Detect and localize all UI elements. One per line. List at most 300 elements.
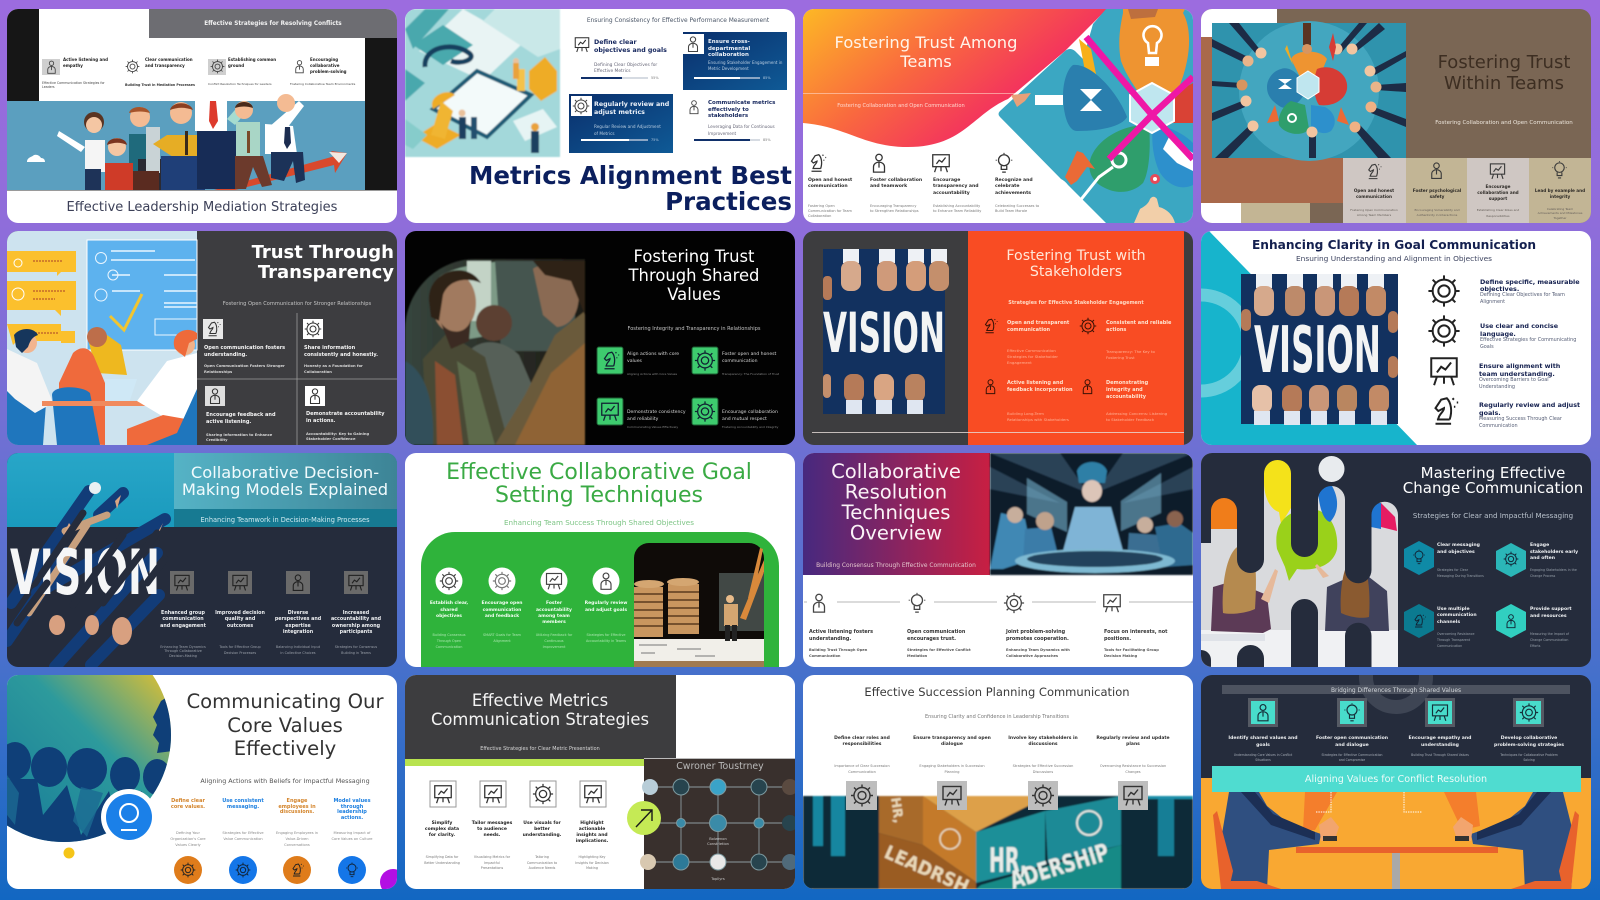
panel: enhancing clarity in goal communication	[1153, 231, 1591, 445]
action items: Communication for Team	[808, 209, 852, 213]
dark capsule overlay	[1201, 453, 1398, 667]
benefit text: ownership among	[332, 623, 381, 629]
subtitle: Aligning Actions with Beliefs for Impactful Messaging	[200, 777, 370, 785]
title: Stakeholders	[1030, 264, 1122, 280]
list text: objectives.	[1480, 285, 1519, 293]
value items	[597, 347, 780, 429]
tile: communicate metrics: effectively to	[708, 107, 749, 113]
benefit text: Decision-Making	[169, 654, 197, 658]
tile: cross-departmental collaboration: 85%	[763, 76, 771, 80]
title: Setting Techniques	[495, 483, 703, 508]
panel: trust through transparency	[7, 231, 397, 445]
strategy items: and transparency	[145, 63, 185, 68]
tile: cross-departmental collaboration: collaboration	[708, 52, 749, 58]
value text: and Compromise	[1339, 758, 1365, 762]
value icons	[174, 856, 366, 884]
title: Within Teams	[1444, 73, 1564, 94]
value text	[1228, 735, 1564, 762]
strategy text: understanding.	[523, 832, 562, 838]
plan text: Strategies for Effective Succession	[1013, 764, 1073, 768]
subtitle: Building Consensus Through Effective Communication	[816, 563, 976, 569]
list text: Alignment	[1480, 299, 1505, 305]
technique text: Encourage open	[482, 600, 522, 606]
plan text: Importance of Clear Succession	[834, 764, 890, 768]
illustration: hands around hub	[1212, 21, 1406, 161]
benefit icons	[170, 571, 368, 594]
hexagon icons	[1404, 541, 1526, 638]
value items: and mutual respect	[722, 416, 767, 422]
values text: leadership	[337, 809, 367, 815]
value text: Foster open communication	[1316, 735, 1388, 741]
value items: communication	[722, 358, 758, 364]
values text: discussions.	[280, 809, 314, 815]
value items: Demonstrate consistency	[627, 409, 686, 415]
technique text: shared	[440, 607, 458, 613]
action items: Fostering Open	[808, 204, 835, 208]
tiles: Authenticity in Interactions	[1417, 213, 1458, 217]
panel: collaborative decision-making models	[7, 453, 397, 667]
technique text: Alignment	[493, 639, 511, 643]
values text: Model values	[333, 798, 371, 804]
strategy items: ground	[228, 63, 244, 68]
action items	[808, 153, 1039, 218]
panel: fostering trust with stakeholders	[803, 231, 1193, 445]
values text	[170, 798, 373, 847]
tiles: Achievements and Milestones	[1538, 211, 1583, 215]
heading bar	[149, 9, 397, 38]
title: Fostering Trust with	[1006, 248, 1146, 264]
benefit text: expertise	[285, 623, 311, 629]
action items: Open and honest	[808, 177, 853, 183]
tile: communicate metrics: Improvement	[708, 131, 737, 136]
action items: Collaboration	[808, 214, 831, 218]
panel: effective metrics communication	[405, 675, 798, 889]
strategy items: Encouraging	[310, 57, 338, 62]
tile: review and adjust metrics: Regularly review and	[594, 101, 669, 108]
green panel	[421, 532, 779, 667]
benefit text: Strategies for Consensus	[335, 645, 377, 649]
stakeholder items: Active listening and	[1007, 380, 1064, 386]
panel: communicating our core values	[0, 615, 406, 895]
value items: and reliability	[627, 416, 659, 422]
tile: review and adjust metrics: Regular Review and Adjustment	[594, 124, 661, 129]
value items: Encourage collaboration	[722, 409, 778, 415]
values text: Use consistent	[222, 798, 264, 804]
list text: Effective Strategies for Communicating	[1480, 337, 1576, 343]
plan text: Communication	[848, 770, 876, 774]
values text: Engage	[287, 798, 308, 804]
technique text: among team	[538, 613, 570, 619]
strategy text: needs.	[484, 832, 501, 838]
strategy items: Active listening and	[63, 57, 108, 62]
value items: Align actions with core	[627, 351, 679, 357]
strategy text: implications.	[576, 838, 609, 844]
technique text: Building Consensus	[432, 633, 466, 637]
value text: Encourage empathy and	[1409, 735, 1471, 741]
benefit text: Balancing Individual Input	[276, 645, 321, 649]
panel: collaborative resolution techniques	[803, 453, 1193, 667]
technique icons	[436, 568, 620, 594]
stakeholder items: Engagement	[1007, 360, 1032, 365]
technique text: Continuous	[544, 639, 564, 643]
plan text: responsibilities	[843, 741, 882, 747]
benefit text: Increased	[343, 610, 370, 616]
title: Core Values	[227, 714, 343, 737]
strategy items: Conflict Resolution Techniques for Leaders	[208, 82, 272, 86]
benefit text: and engagement	[160, 623, 207, 629]
strategy items: Clear communication	[145, 57, 193, 62]
title: Collaborative Decision-	[191, 463, 379, 482]
benefit text: communication	[162, 616, 204, 622]
value text: Techniques for Collaborative Problem	[1499, 753, 1558, 757]
yellow dot	[64, 848, 74, 858]
title: Practices	[665, 187, 792, 216]
tile: communicate metrics	[690, 100, 776, 141]
photo: futuristic conference	[990, 453, 1193, 575]
strategy text: Highlight	[580, 820, 605, 826]
purple accent	[380, 869, 406, 895]
stakeholder items: feedback incorporation	[1007, 387, 1073, 393]
banner text: Aligning Values for Conflict Resolution	[1305, 774, 1487, 785]
values text: Strategies for Effective	[222, 831, 264, 835]
values text: Value-Driven	[285, 837, 309, 841]
tile: review and adjust metrics: 75%	[651, 138, 659, 142]
benefit text: quality and	[225, 616, 256, 622]
title: Resolution	[845, 480, 947, 504]
change items: Messaging During Transitions	[1437, 574, 1484, 578]
photo: vision fists: VISION	[823, 301, 945, 365]
photo: vision fists	[1241, 274, 1398, 425]
tiles: Encourage	[1486, 184, 1511, 189]
tiles: Open and honest	[1354, 188, 1394, 193]
list text: Defining Clear Objectives for Team	[1480, 292, 1565, 298]
plan text: Planning	[944, 770, 960, 774]
action items: communication	[808, 183, 848, 189]
title: Fostering Trust Among	[835, 33, 1017, 52]
benefit text: participants	[340, 629, 372, 635]
magenta cross	[1086, 37, 1193, 159]
list text: Regularly review and adjust	[1479, 401, 1580, 409]
technique text: Strategies for Effective	[587, 633, 625, 637]
plan text: plans	[1126, 741, 1140, 747]
technique text: members	[542, 619, 566, 625]
title: Effective Metrics	[472, 691, 608, 710]
photo: HR leadership cubes	[803, 796, 1193, 898]
technique text	[430, 600, 627, 649]
title: Metrics Alignment Best	[469, 161, 792, 190]
title: Effective Leadership Mediation Strategies	[67, 200, 338, 215]
subtitle: Fostering Integrity and Transparency in Relationships	[628, 326, 761, 332]
strategy text: Insights for Decision	[575, 861, 609, 865]
photo: network board: Constrletion	[707, 842, 729, 846]
benefit text: accountability and	[331, 616, 382, 622]
teal wedge	[1201, 231, 1417, 445]
quadrant text: Demonstrate accountability	[306, 411, 385, 417]
action items: transparency and	[933, 183, 979, 189]
value items: Communicating Values Effectively	[627, 425, 678, 429]
change items: Through Transparent	[1436, 638, 1471, 642]
action items: Recognize and	[995, 177, 1033, 183]
value text: and dialogue	[1335, 742, 1369, 748]
values text: Conversations	[284, 843, 310, 847]
tile: define clear objectives: Effective Metrics	[594, 68, 631, 74]
photo: HR leadership cubes: HR,	[887, 796, 906, 824]
strategy items: Establishing common	[228, 57, 276, 62]
value text: Develop collaborative	[1501, 735, 1557, 741]
grid	[197, 313, 397, 445]
strategy text: Presentations	[481, 866, 503, 870]
tile: cross-departmental collaboration: departmental	[708, 46, 750, 52]
quadrant text: Collaboration	[304, 370, 332, 374]
subtitle: Fostering Collaboration and Open Communication	[837, 103, 965, 109]
title: Mastering Effective	[1421, 464, 1565, 482]
process text: Strategies for Effective Conflict	[907, 648, 971, 652]
tiles: Celebrating Team	[1547, 207, 1573, 211]
action items: to Strengthen Relationships	[870, 209, 919, 213]
quadrant text: Open Communication Fosters Stronger	[204, 364, 285, 368]
list text: Use clear and concise	[1480, 322, 1559, 330]
value icons	[1248, 698, 1544, 727]
strategy text: Simplifying Data for	[426, 855, 459, 859]
stakeholder items: actions	[1106, 327, 1126, 333]
strategy icons	[430, 781, 606, 807]
stakeholder items: Consistent and reliable	[1106, 320, 1172, 326]
gradient blob	[803, 9, 1107, 147]
value text: Building Trust Through Shared Values	[1411, 753, 1469, 757]
title: Communicating Our	[186, 690, 384, 713]
photo: capsule collage	[1201, 453, 1398, 667]
value text: Understanding Core Values in Conflict	[1234, 753, 1293, 757]
quadrant text: Encourage feedback and	[206, 412, 276, 418]
plan text: discussions	[1028, 741, 1058, 747]
photo: network board: Cwroner Toustrney	[676, 761, 764, 772]
benefit text: in Collective Choices	[280, 651, 316, 655]
tiles: communication	[1356, 194, 1392, 199]
plan text: dialogue	[941, 741, 963, 747]
subtitle: Strategies for Effective Stakeholder Engagement	[1008, 300, 1144, 306]
panel: mastering effective change communication	[1201, 453, 1591, 667]
tiles: Among Team Members	[1357, 213, 1392, 217]
photo: HR leadership cubes: HR,	[989, 841, 1027, 881]
subtitle: Effective Strategies for Clear Metric Presentation	[480, 746, 600, 752]
list text	[1479, 278, 1580, 429]
technique text: Utilizing Feedback for	[536, 633, 573, 637]
strategy text: Use visuals for	[523, 820, 561, 826]
change items: Strategies for Clear	[1437, 568, 1469, 572]
action items: and teamwork	[870, 183, 908, 189]
benefit text: Enhanced group	[161, 610, 206, 616]
action items: Celebrating Successes to	[995, 204, 1039, 208]
tiles: Together	[1552, 216, 1567, 220]
tile: define clear objectives: 55%	[651, 76, 659, 80]
benefit text: Diverse	[288, 610, 309, 616]
values text: Value Communication	[223, 837, 263, 841]
change items	[1436, 542, 1578, 648]
change items: Communication	[1437, 644, 1462, 648]
stakeholder items: Demonstrating	[1106, 380, 1149, 386]
benefit text	[160, 610, 382, 658]
illustration: silhouettes in circle	[0, 615, 187, 855]
tile: review and adjust metrics: adjust metrics	[594, 109, 645, 116]
stakeholder items: accountability	[1106, 394, 1147, 400]
action items: celebrate	[995, 183, 1020, 189]
change items: Measuring the Impact of	[1530, 632, 1570, 636]
title: Effectively	[234, 737, 337, 760]
subtitle: Fostering Collaboration and Open Communication	[1435, 120, 1573, 126]
values text: actions.	[341, 815, 363, 821]
quadrant text: Honesty as a Foundation for	[304, 364, 363, 368]
process text: encourages trust.	[907, 636, 956, 642]
strategy text: better	[534, 826, 551, 832]
strategy text: complex data	[425, 826, 459, 832]
photo: network board: Bolwenon	[709, 837, 727, 841]
value text: problem-solving strategies	[1494, 742, 1564, 748]
change items: Change Process	[1530, 574, 1556, 578]
change items: Engaging Stakeholders in the	[1530, 568, 1577, 572]
tiles: Establishing Clear Roles and	[1477, 208, 1519, 212]
banner	[1212, 766, 1581, 792]
photo: HR leadership cubes: ADERSHIP	[1007, 838, 1112, 895]
stakeholder items: integrity and	[1106, 387, 1143, 393]
subtitle: Enhancing Teamwork in Decision-Making Processes	[200, 516, 370, 524]
values text: employees in	[278, 804, 316, 810]
faint ring	[1153, 295, 1249, 391]
heading text: Effective Strategies for Resolving Conflicts	[204, 21, 342, 27]
title: Effective Collaborative Goal	[446, 460, 752, 485]
strategy text: actionable	[579, 826, 605, 832]
technique text: Improvement	[543, 645, 566, 649]
tile: define clear objectives: objectives and goals	[594, 47, 667, 54]
title: Through Shared	[628, 266, 759, 285]
change items: Change Communication	[1530, 638, 1568, 642]
action items: Encouraging Transparency	[870, 204, 916, 208]
quadrant text: Stakeholder Confidence	[306, 437, 356, 441]
plan text: Discussions	[1033, 770, 1053, 774]
tiles: integrity	[1550, 194, 1571, 199]
tile: review and adjust metrics: of Metrics	[594, 131, 615, 136]
change items: and objectives	[1437, 549, 1475, 555]
change items: and resources	[1530, 613, 1567, 619]
photo: diagonal vision stripes: VISION	[10, 536, 160, 609]
photo: network board: Topllyrs	[710, 877, 725, 881]
list text: Understanding	[1479, 384, 1515, 390]
process text: Focus on interests, not	[1104, 629, 1168, 635]
process text: Enhancing Team Dynamics with	[1006, 648, 1070, 652]
values text: Values Clearly	[175, 843, 202, 847]
tile: define clear objectives	[574, 37, 667, 79]
quadrant text: Relationships	[204, 370, 233, 374]
process text	[809, 629, 1168, 658]
title: Fostering Trust	[634, 247, 755, 266]
tiles: collaboration and	[1477, 190, 1519, 195]
strategy items: Building Trust in Mediation Processes	[125, 83, 195, 87]
title: Trust Through	[252, 242, 394, 263]
list text: goals.	[1479, 409, 1501, 417]
action items: Encourage	[933, 177, 960, 183]
value items: Aligning Actions with Core Values	[627, 372, 677, 376]
process text: Building Trust Through Open	[809, 648, 868, 652]
tiles: Responsibilities	[1486, 214, 1510, 218]
photo: coins and figurine	[634, 543, 764, 667]
change items: Efforts	[1530, 644, 1541, 648]
tiles: support	[1489, 196, 1507, 201]
process text: Mediation	[907, 654, 928, 658]
plan text: Engaging Stakeholders in Succession	[919, 764, 985, 768]
values text: Core Values on Culture	[331, 837, 373, 841]
title: Making Models Explained	[182, 480, 388, 499]
strategy text: to audience	[477, 826, 507, 832]
title: Teams	[899, 52, 952, 71]
process text: positions.	[1104, 636, 1131, 642]
strategy items: Leaders	[42, 85, 55, 89]
tiles: Encouraging Vulnerability and	[1414, 208, 1460, 212]
quadrant text: consistently and honestly.	[304, 352, 378, 358]
plan text: Define clear roles and	[834, 735, 890, 741]
technique text: Through Open	[436, 639, 461, 643]
subtitle: Fostering Open Communication for Stronger Relationships	[223, 301, 372, 307]
list text: Define specific, measurable	[1480, 278, 1580, 286]
benefit text: Building in Teams	[341, 651, 371, 655]
change items: communication	[1437, 612, 1477, 618]
tile: communicate metrics: Communicate metrics	[708, 100, 776, 106]
quadrant text: understanding.	[204, 352, 247, 358]
tile: define clear objectives: Define clear	[594, 39, 638, 46]
benefit text: Through Collaborative	[163, 649, 202, 653]
benefit text: outcomes	[227, 623, 253, 629]
value text: goals	[1256, 742, 1270, 748]
process text: Joint problem-solving	[1005, 629, 1066, 635]
action items: achievements	[995, 190, 1031, 196]
strategy text: Impactful	[484, 861, 500, 865]
tile: communicate metrics: stakeholders	[708, 113, 749, 119]
value text: Identify shared values and	[1228, 735, 1298, 741]
tiles: Fostering Open Communication	[1350, 208, 1398, 212]
stakeholder items: Relationships with Stakeholders	[1007, 417, 1069, 422]
panel: effective leadership mediation strategies	[7, 9, 397, 223]
strategy items: Effective Communication Strategies for	[42, 81, 105, 85]
photo: network board	[640, 758, 798, 889]
plan text: Changes	[1125, 770, 1141, 774]
process text: Open communication	[907, 629, 966, 635]
tile: review and adjust metrics	[569, 94, 673, 153]
plan text	[834, 735, 1170, 774]
title: Transparency	[258, 262, 394, 283]
values text: Engaging Employees in	[276, 831, 318, 835]
tile: communicate metrics: 85%	[763, 138, 771, 142]
list text: language.	[1480, 330, 1516, 338]
change items: and often	[1530, 555, 1555, 561]
stakeholder items: Open and transparent	[1007, 320, 1070, 326]
quadrant text: in actions.	[306, 418, 335, 424]
stakeholder items: Fostering Trust	[1106, 355, 1135, 360]
stakeholder items: Transparency: The Key to	[1105, 349, 1156, 354]
icons	[203, 319, 325, 406]
process text: promotes cooperation.	[1006, 636, 1069, 642]
value text: Solving	[1523, 758, 1535, 762]
list icons	[1428, 275, 1460, 424]
value items: Fostering Accountability and Integrity	[722, 425, 779, 429]
value text: Situations	[1255, 758, 1271, 762]
process text: Collaborative Approaches	[1006, 654, 1058, 658]
technique text: Foster	[546, 600, 563, 606]
title box	[174, 453, 397, 509]
quadrant text: Sharing Information to Enhance	[206, 433, 273, 437]
panel: fostering trust through shared values	[405, 231, 795, 445]
change items: Use multiple	[1437, 606, 1470, 612]
tile: cross-departmental collaboration	[683, 32, 787, 90]
plan text: Involve key stakeholders in	[1008, 735, 1078, 741]
title: Communication Strategies	[431, 710, 649, 729]
